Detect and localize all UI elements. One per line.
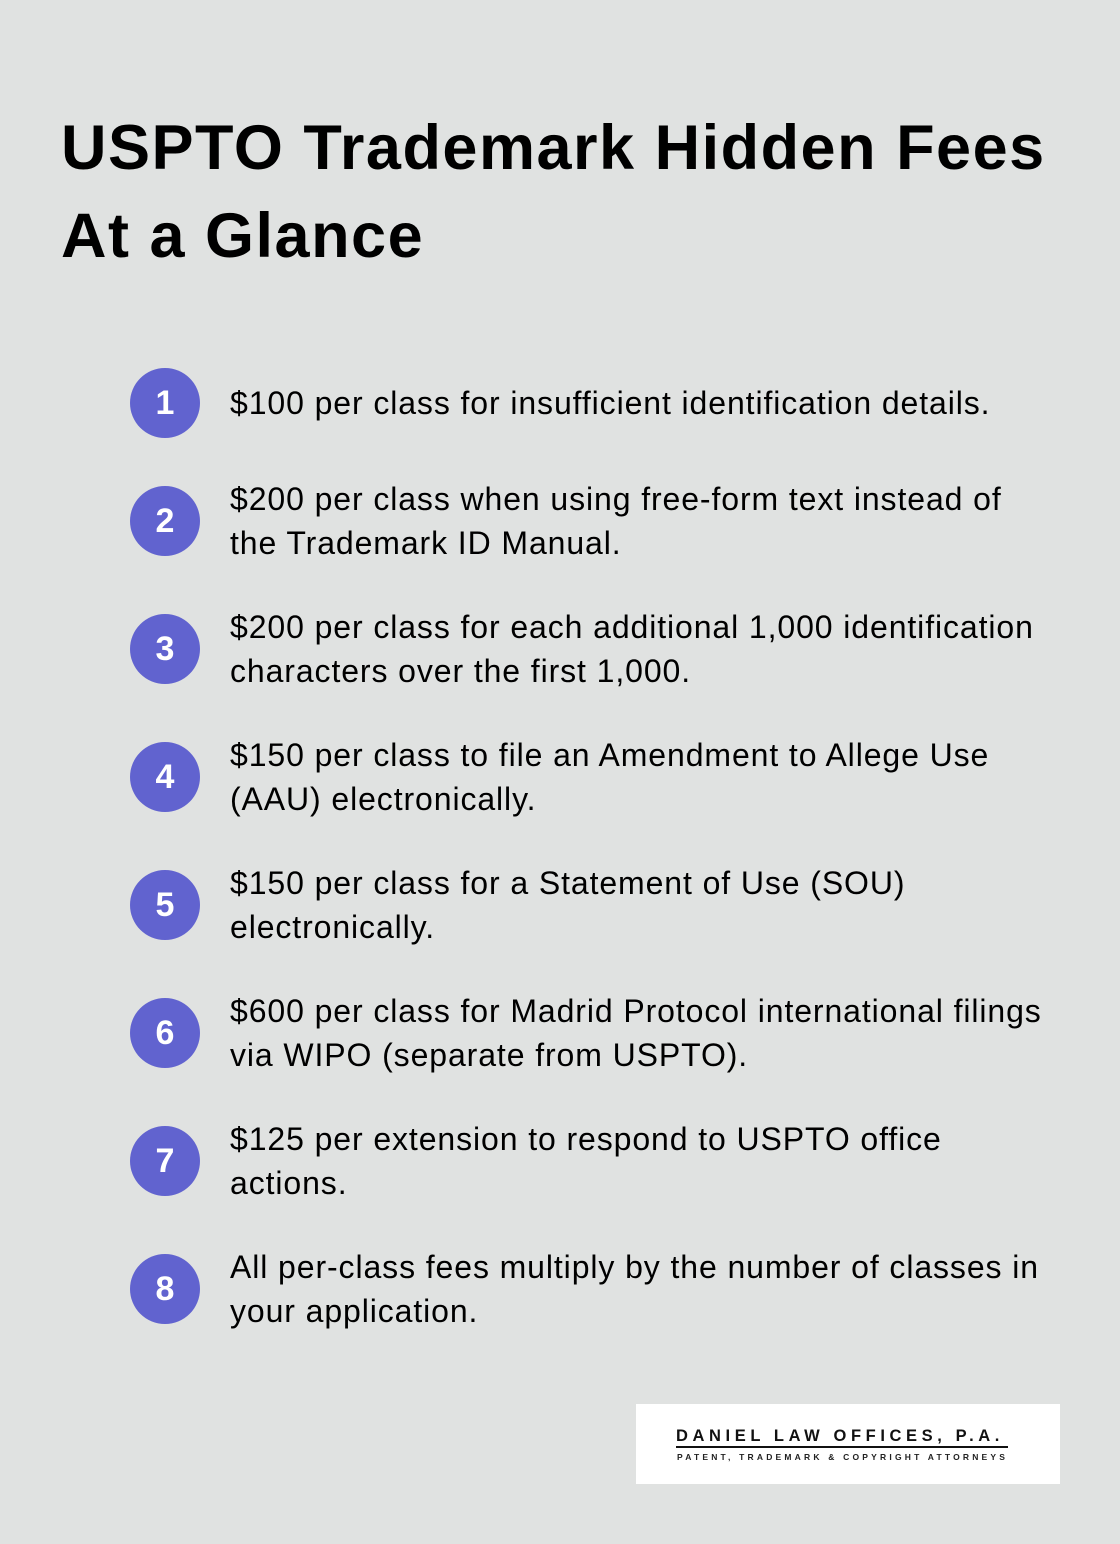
item 4: $150 per class to file an Amendment to Allege Use: [230, 737, 989, 773]
logo: DANIEL LAW OFFICES, P.A.: [676, 1427, 1004, 1445]
item 1: $100 per class for insufficient identification details.: [230, 385, 990, 421]
item 4: 4: [156, 758, 174, 796]
item 5: [130, 865, 905, 945]
item 6: [130, 993, 1042, 1073]
item 3: [130, 609, 1034, 689]
item 2: [130, 481, 1002, 561]
item 5: electronically.: [230, 909, 435, 945]
item 6: 6: [156, 1014, 174, 1052]
item 8: [130, 1249, 1039, 1329]
item 5: 5: [156, 886, 174, 924]
logo: PATENT, TRADEMARK & COPYRIGHT ATTORNEYS: [677, 1452, 1008, 1462]
item 7: [130, 1121, 942, 1201]
item 2: 2: [156, 502, 174, 540]
item 3: $200 per class for each additional 1,000 identification: [230, 609, 1034, 645]
item 7: actions.: [230, 1165, 347, 1201]
item 7: 7: [156, 1142, 174, 1180]
item 8: All per-class fees multiply by the number of classes in: [230, 1249, 1039, 1285]
item 6: $600 per class for Madrid Protocol international filings: [230, 993, 1042, 1029]
item 5: $150 per class for a Statement of Use (SOU): [230, 865, 905, 901]
item 2: $200 per class when using free-form text instead of: [230, 481, 1002, 517]
item 3: characters over the first 1,000.: [230, 653, 691, 689]
item 1: [130, 368, 990, 438]
item 8: your application.: [230, 1293, 478, 1329]
title: [61, 113, 1046, 271]
item 4: (AAU) electronically.: [230, 781, 536, 817]
item 1: 1: [156, 384, 174, 422]
item 6: via WIPO (separate from USPTO).: [230, 1037, 748, 1073]
title: At a Glance: [61, 201, 424, 271]
item 3: 3: [156, 630, 174, 668]
item 4: [130, 737, 989, 817]
logo: [636, 1404, 1060, 1484]
item 2: the Trademark ID Manual.: [230, 525, 622, 561]
item 8: 8: [156, 1270, 174, 1308]
title: USPTO Trademark Hidden Fees: [61, 113, 1046, 183]
item 7: $125 per extension to respond to USPTO office: [230, 1121, 942, 1157]
